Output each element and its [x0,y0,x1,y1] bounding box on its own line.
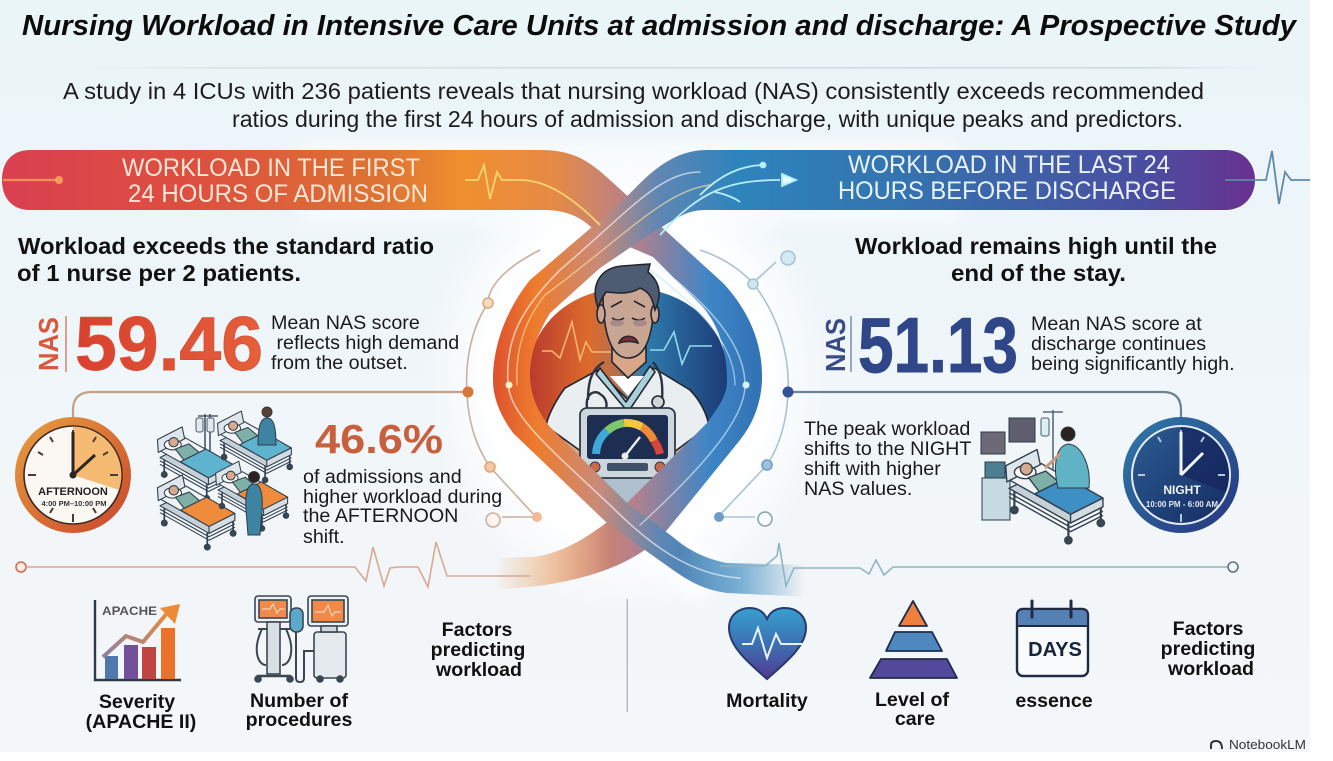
right band heading: HOURS BEFORE DISCHARGE [838,177,1176,205]
afternoon text: of admissions and [303,466,462,488]
label: severity: (APACHE II) [86,711,196,733]
connector circuit left [467,250,542,527]
stat: NAS 59.46: NAS [33,317,64,371]
statement left [17,233,434,286]
neck and face [595,264,659,378]
icon: afternoon clock [15,417,131,533]
stat: NAS 59.46: 59.46 [75,302,263,387]
stat: NAS 59.46: reflects high demand [271,332,459,354]
label: level of care: care [895,708,935,730]
stat: 46.6%: 46.6% [315,416,443,462]
icon: night clock: 10:00 PM - 6:00 AM [1146,500,1218,509]
subtitle [63,78,1204,132]
night text: shift with higher [804,458,941,480]
title: Nursing Workload in Intensive Care Units at admission and discharge: A Prospective Study [22,10,1298,42]
central disc [528,288,728,515]
label: procedures [246,690,352,731]
afternoon text: higher workload during [303,486,502,508]
statement right: end of the stay. [951,260,1126,286]
ribbon: discharge [493,150,1255,597]
night text: shifts to the NIGHT [804,438,971,460]
label: level of care [875,689,949,730]
afternoon text [303,466,502,548]
icon: afternoon clock: 4:00 PM–10:00 PM [41,499,107,508]
left band line [3,176,63,184]
icon: hospital beds [157,407,292,550]
icon: calendar: DAYS [1028,639,1082,661]
label: mortality: Mortality [726,690,808,712]
night text [804,418,971,500]
label: severity [86,691,196,733]
label: procedures: Number of [250,690,348,712]
icon: calendar [1017,601,1088,676]
night text: NAS values. [804,478,912,500]
icon: apache chart: APACHE [102,604,157,618]
icon: afternoon clock: AFTERNOON [38,486,108,498]
stat: NAS 51.13: 51.13 [858,301,1018,389]
statement right [855,233,1217,286]
icon: procedures equipment [255,596,348,682]
stat: NAS 51.13: being significantly high. [1031,353,1235,375]
connector to afternoon clock [73,386,474,418]
afternoon text: the AFTERNOON [303,505,458,527]
label: factors left [431,619,525,681]
nurse figure bottom [246,472,262,535]
afternoon text: shift. [303,526,345,548]
icon: pyramid [870,601,957,678]
label: essence: essence [1015,690,1093,712]
ribbon: admission [2,150,762,590]
arrow in right band [660,162,796,235]
stat: NAS 51.13 [820,301,1235,389]
ecg in left band [465,165,600,225]
statement right: Workload remains high until the [855,233,1217,259]
scrubs [546,362,709,512]
icon: icu bed with nurse [981,410,1104,544]
ecg line right [720,543,1238,586]
notebooklm credit: NotebookLM [1229,737,1306,752]
icon: heart [729,608,806,679]
statement left: of 1 nurse per 2 patients. [17,260,301,286]
caregiver [1045,427,1089,488]
left band heading: WORKLOAD IN THE FIRST [122,154,420,182]
stat: NAS 59.46 [33,302,459,387]
label: factors left: predicting [431,639,525,661]
label: procedures: procedures [246,709,352,731]
label: factors left: Factors [442,619,512,641]
gauge monitor [580,408,675,478]
header band left [3,154,600,225]
nurse illustration [528,264,728,515]
stat: NAS 51.13: NAS [820,318,851,372]
icon: night clock [1123,417,1239,533]
night text: The peak workload [804,418,970,440]
label: factors right: workload [1167,658,1254,680]
label: severity: Severity [99,691,175,713]
right band ecg tail [1225,151,1310,204]
subtitle: A study in 4 ICUs with 236 patients reveals that nursing workload (NAS) consistently exceeds recommended [63,78,1204,104]
nurse figure top [258,407,276,445]
stat: NAS 51.13: Mean NAS score at [1031,313,1202,335]
left band heading: 24 HOURS OF ADMISSION [128,180,428,208]
icon: apache chart [95,600,181,680]
ecg in disc [542,322,712,364]
right band heading: WORKLOAD IN THE LAST 24 [848,151,1170,179]
vertical divider [626,599,628,712]
stat: NAS 59.46: Mean NAS score [271,312,420,334]
hair [595,264,659,310]
right band heading [838,151,1176,205]
title rule [80,67,1260,68]
connector to night clock [782,386,1181,418]
header band right [660,151,1310,235]
icon: night clock: NIGHT [1163,483,1201,497]
ecg line left [16,542,530,587]
label: factors right: predicting [1161,638,1255,660]
label: level of care: Level of [875,689,949,711]
ribbon light streaks [506,172,750,578]
label: factors left: workload [435,659,522,681]
subtitle: ratios during the first 24 hours of admission and discharge, with unique peaks and predictors. [232,106,1183,132]
stat: NAS 59.46: from the outset. [271,352,408,374]
statement left: Workload exceeds the standard ratio [18,233,434,259]
connector circuit right [700,250,795,526]
label: factors right: Factors [1173,618,1243,640]
left band heading [122,154,428,208]
label: factors right [1161,618,1255,680]
stat: NAS 51.13: discharge continues [1031,333,1206,355]
center glow [300,135,960,615]
